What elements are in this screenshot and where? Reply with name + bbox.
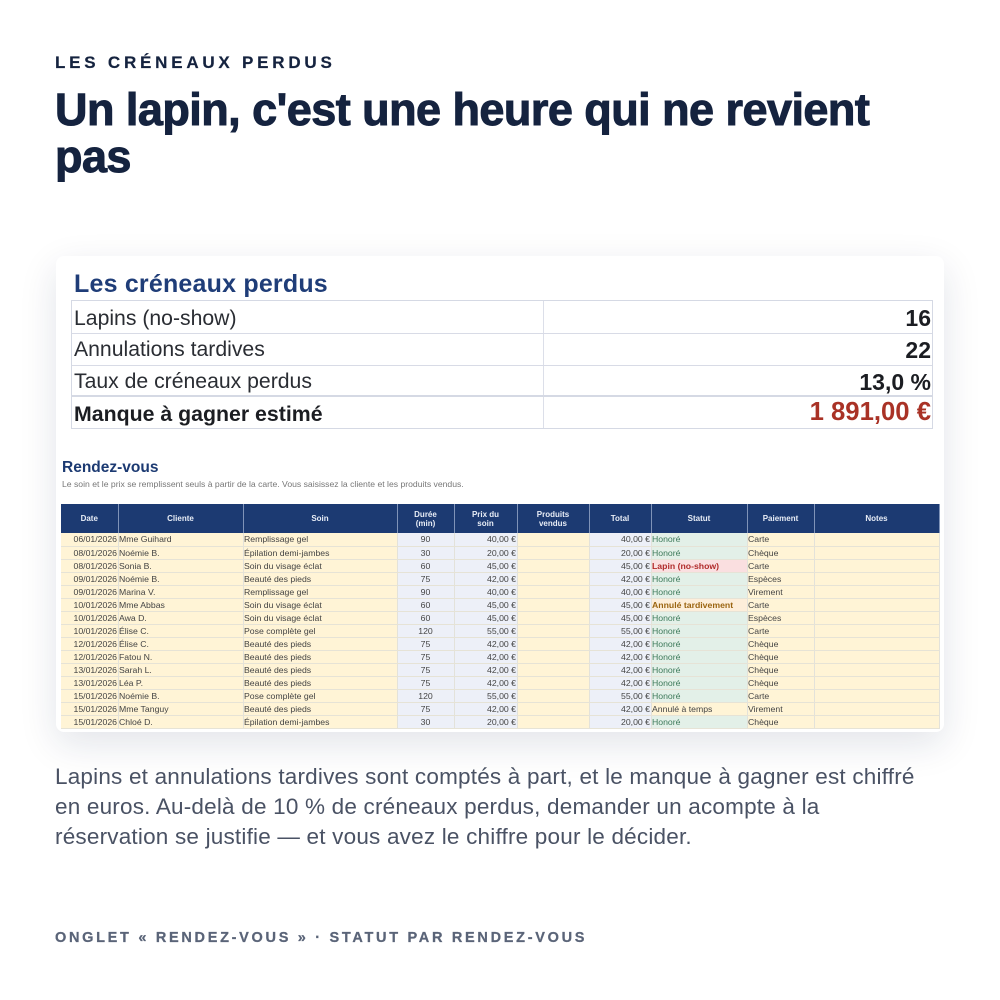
table rows: 90: [421, 586, 430, 596]
table rows: Carte: [748, 600, 769, 610]
table rows: Beauté des pieds: [244, 574, 311, 584]
row: manque à gagner: 1 891,00 €: [810, 398, 931, 426]
row: lapins: Lapins (no-show): [74, 307, 237, 330]
table rows: Mme Tanguy: [119, 704, 169, 714]
table rows: 42,00 €: [621, 678, 650, 688]
table rows: 40,00 €: [621, 586, 650, 596]
table rows: 10/01/2026: [74, 612, 117, 622]
row: taux: [72, 365, 932, 397]
table rows: 42,00 €: [487, 664, 516, 674]
table rows: 55,00 €: [621, 626, 650, 636]
table rows: Soin du visage éclat: [244, 612, 322, 622]
table rows: Honoré: [652, 716, 680, 726]
table rows: 120: [418, 626, 433, 636]
table rows: 40,00 €: [621, 534, 650, 544]
table rows: 45,00 €: [487, 560, 516, 570]
table rows: Honoré: [652, 574, 680, 584]
table rows: 13/01/2026: [74, 664, 117, 674]
row: taux: 13,0 %: [859, 369, 931, 395]
table header: Date: [81, 514, 98, 523]
table rows: Honoré: [652, 678, 680, 688]
table rows: 42,00 €: [621, 638, 650, 648]
row: manque à gagner: [74, 398, 931, 426]
table rows: 75: [421, 678, 430, 688]
table rows: Beauté des pieds: [244, 704, 311, 714]
table rows: 10/01/2026: [74, 626, 117, 636]
row: annulations tardives: Annulations tardives: [74, 338, 265, 361]
sheet heading: les créneaux perdus: Les créneaux perdus: [74, 270, 328, 298]
table rows: Épilation demi-jambes: [244, 548, 329, 558]
table rows: 09/01/2026: [74, 586, 117, 596]
body paragraph: réservation se justifie — et vous avez le chiffre pour le décider.: [55, 824, 692, 849]
table rows: 75: [421, 664, 430, 674]
table rows: 08/01/2026: [74, 548, 117, 558]
table rows: 12/01/2026: [74, 638, 117, 648]
table rows: 42,00 €: [621, 652, 650, 662]
table header: Cliente: [167, 514, 194, 523]
table rows: Carte: [748, 690, 769, 700]
table rows: 08/01/2026: [74, 560, 117, 570]
table rows: Chèque: [748, 664, 778, 674]
table rows: 30: [421, 548, 430, 558]
table header: soin: [477, 518, 494, 528]
table rows: 20,00 €: [621, 716, 650, 726]
table rows: Beauté des pieds: [244, 638, 311, 648]
table rows: 45,00 €: [621, 560, 650, 570]
table rows: 42,00 €: [487, 638, 516, 648]
table rows: Marina V.: [119, 586, 155, 596]
table rows: 40,00 €: [487, 534, 516, 544]
table rows: 15/01/2026: [74, 704, 117, 714]
table rows: Honoré: [652, 638, 680, 648]
table rows: Honoré: [652, 534, 680, 544]
table rows: Chèque: [748, 638, 778, 648]
table rows: Sarah L.: [119, 664, 152, 674]
table rows: Honoré: [652, 652, 680, 662]
row: manque à gagner: Manque à gagner estimé: [74, 402, 323, 426]
table rows: 20,00 €: [487, 716, 516, 726]
table rows: Chèque: [748, 678, 778, 688]
table rows: 60: [421, 600, 430, 610]
table: rendez-vous: [61, 504, 940, 729]
table rows: 45,00 €: [621, 612, 650, 622]
table header: [61, 504, 939, 533]
table rows: Élise C.: [119, 626, 149, 636]
table rows: 45,00 €: [487, 600, 516, 610]
table rows: Chèque: [748, 548, 778, 558]
table rows: Noémie B.: [119, 574, 160, 584]
table rows: Beauté des pieds: [244, 678, 311, 688]
table rows: 09/01/2026: [74, 574, 117, 584]
table header: Notes: [865, 514, 888, 523]
table rows: Virement: [748, 586, 783, 596]
table rows: 75: [421, 638, 430, 648]
table rows: 20,00 €: [621, 548, 650, 558]
table header: (min): [416, 518, 435, 528]
table header: Paiement: [763, 514, 798, 523]
table rows: Noémie B.: [119, 690, 160, 700]
section heading: rendez-vous: Rendez-vous: [62, 459, 158, 476]
table rows: 55,00 €: [487, 626, 516, 636]
table rows: Sonia B.: [119, 560, 152, 570]
table rows: 45,00 €: [621, 600, 650, 610]
table rows: 42,00 €: [487, 704, 516, 714]
panel: summary table: [71, 300, 933, 429]
table header: Soin: [311, 514, 329, 523]
panel: spreadsheet card: [56, 256, 944, 732]
table rows: Remplissage gel: [244, 534, 308, 544]
row: lapins: 16: [905, 305, 931, 331]
table rows: 90: [421, 534, 430, 544]
body paragraph: en euros. Au-delà de 10 % de créneaux perdus, demander un acompte à la: [55, 794, 820, 819]
table rows: Annulé tardivement: [652, 600, 733, 610]
table header: Total: [611, 514, 629, 523]
table rows: Soin du visage éclat: [244, 600, 322, 610]
table rows: [61, 533, 939, 728]
row: annulations tardives: [72, 334, 932, 366]
table rows: Annulé à temps: [652, 704, 712, 714]
table rows: 45,00 €: [487, 612, 516, 622]
table rows: 12/01/2026: [74, 652, 117, 662]
table rows: 10/01/2026: [74, 600, 117, 610]
table rows: Lapin (no-show): [652, 560, 719, 570]
table rows: 40,00 €: [487, 586, 516, 596]
table rows: Élise C.: [119, 638, 149, 648]
table rows: 42,00 €: [621, 574, 650, 584]
table rows: Soin du visage éclat: [244, 560, 322, 570]
table rows: Chèque: [748, 716, 778, 726]
table rows: 55,00 €: [621, 690, 650, 700]
table rows: 42,00 €: [487, 574, 516, 584]
table rows: Chèque: [748, 652, 778, 662]
table rows: 75: [421, 574, 430, 584]
table rows: Beauté des pieds: [244, 652, 311, 662]
table rows: Honoré: [652, 626, 680, 636]
table rows: 13/01/2026: [74, 678, 117, 688]
table rows: Honoré: [652, 586, 680, 596]
body paragraph: Lapins et annulations tardives sont comptés à part, et le manque à gagner est chiffré: [55, 764, 915, 789]
table rows: 60: [421, 560, 430, 570]
table rows: Épilation demi-jambes: [244, 716, 329, 726]
table rows: Chloé D.: [119, 716, 153, 726]
table rows: Mme Guihard: [119, 534, 172, 544]
table rows: 42,00 €: [621, 704, 650, 714]
table rows: Carte: [748, 560, 769, 570]
table rows: Mme Abbas: [119, 600, 165, 610]
table rows: Fatou N.: [119, 652, 152, 662]
table rows: 20,00 €: [487, 548, 516, 558]
table rows: Espèces: [748, 574, 781, 584]
table rows: Carte: [748, 534, 769, 544]
table rows: 42,00 €: [621, 664, 650, 674]
table rows: Honoré: [652, 664, 680, 674]
table rows: 55,00 €: [487, 690, 516, 700]
table rows: Noémie B.: [119, 548, 160, 558]
table rows: 06/01/2026: [74, 534, 117, 544]
table rows: Honoré: [652, 548, 680, 558]
table rows: Espèces: [748, 612, 781, 622]
table rows: Awa D.: [119, 612, 147, 622]
table rows: 15/01/2026: [74, 716, 117, 726]
row: annulations tardives: 22: [905, 337, 931, 363]
title: Un lapin, c'est une heure qui ne revient: [55, 84, 869, 135]
table rows: 30: [421, 716, 430, 726]
title: [55, 84, 870, 182]
title: pas: [55, 131, 131, 182]
section note: Le soin et le prix se remplissent seuls à partir de la carte. Vous saisissez la cliente et les produits vendus.: [62, 479, 464, 489]
row: taux: Taux de créneaux perdus: [74, 370, 312, 393]
table header: Durée: [414, 510, 437, 518]
table rows: Pose complète gel: [244, 690, 315, 700]
table header: Statut: [688, 514, 710, 523]
table rows: 60: [421, 612, 430, 622]
eyebrow: LES CRÉNEAUX PERDUS: [55, 53, 336, 72]
table rows: 15/01/2026: [74, 690, 117, 700]
table rows: Remplissage gel: [244, 586, 308, 596]
table header: Prix du: [472, 510, 499, 518]
table rows: 75: [421, 704, 430, 714]
footer caption: ONGLET « RENDEZ-VOUS » · STATUT PAR RENDEZ-VOUS: [55, 930, 587, 946]
table rows: Pose complète gel: [244, 626, 315, 636]
table rows: 75: [421, 652, 430, 662]
table rows: Honoré: [652, 612, 680, 622]
table rows: 42,00 €: [487, 652, 516, 662]
table header: vendus: [539, 518, 567, 528]
table rows: Léa P.: [119, 678, 143, 688]
table rows: Beauté des pieds: [244, 664, 311, 674]
table rows: Carte: [748, 626, 769, 636]
table rows: 120: [418, 690, 433, 700]
table header: Produits: [537, 510, 569, 518]
table rows: 42,00 €: [487, 678, 516, 688]
row: lapins: [72, 302, 932, 334]
table rows: Virement: [748, 704, 783, 714]
table rows: Honoré: [652, 690, 680, 700]
body paragraph: [55, 764, 915, 849]
